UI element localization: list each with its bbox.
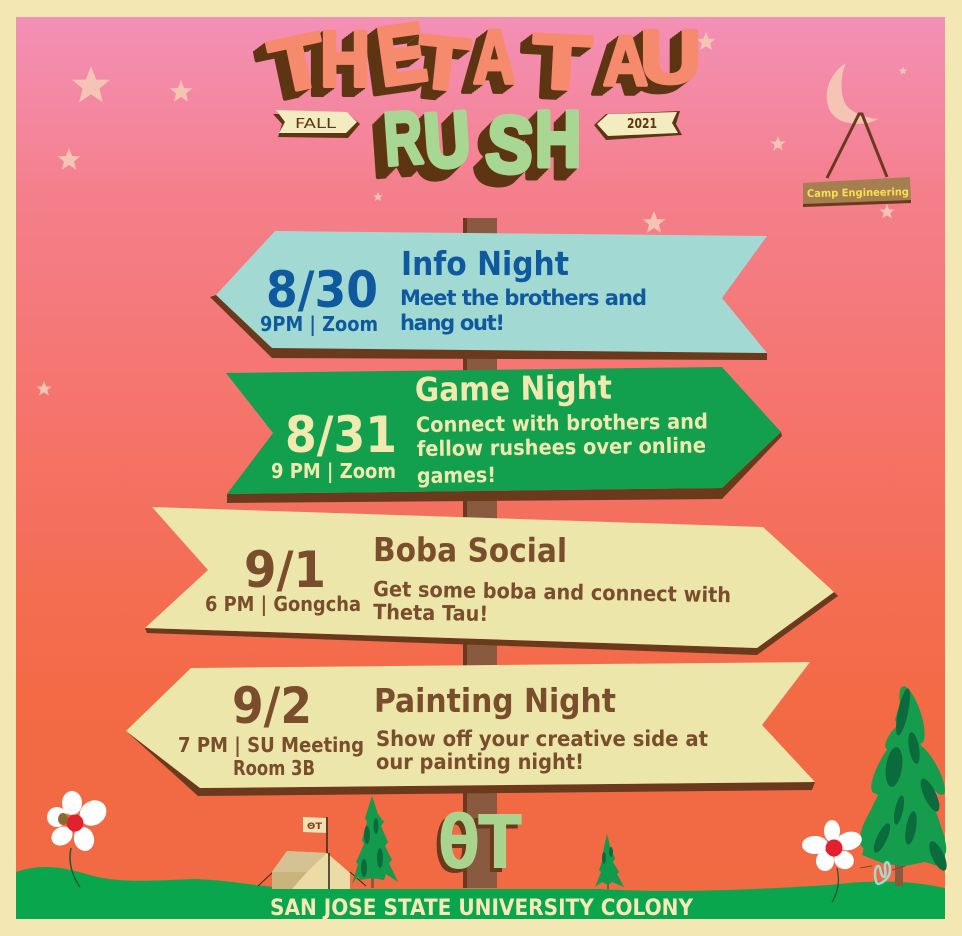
- tent with flag: [258, 817, 366, 889]
- pine tree: by tent: [352, 796, 398, 888]
- title: Rush: U: [421, 96, 473, 185]
- flower: left with bee: [47, 791, 111, 887]
- pine tree: large right: [853, 684, 953, 886]
- sign: Info Night: 8/30: [266, 261, 378, 319]
- pine tree: small: [595, 834, 624, 889]
- sign: Painting Night: Show off your creative side at: [376, 727, 708, 751]
- sign: Game Night: fellow rushees over online: [417, 433, 706, 461]
- sign: Boba Social: Boba Social: [373, 530, 567, 570]
- sign: Game Night: Game Night: [415, 368, 612, 409]
- signpost: [463, 218, 497, 888]
- title: Theta Tau: [263, 6, 701, 110]
- 2021 banner: [594, 111, 682, 140]
- sign: Info Night: hang out!: [400, 311, 505, 335]
- sign: Boba Social: [145, 507, 838, 655]
- Greek letters logo: T: [478, 800, 522, 886]
- title: Theta Tau: T: [413, 19, 473, 107]
- sign: Info Night: 9PM | Zoom: [260, 312, 378, 336]
- sign: Info Night: Meet the brothers and: [400, 286, 647, 310]
- Greek letters logo: θ: [438, 800, 480, 886]
- title: Theta Tau: H: [320, 15, 370, 103]
- sign: Game Night: [226, 367, 782, 503]
- sign: Info Night: [210, 231, 767, 360]
- 2021 banner: 2021: [627, 117, 657, 132]
- sign: Painting Night: 7 PM | SU Meeting: [178, 733, 364, 757]
- title: Theta Tau: E: [372, 6, 432, 104]
- decorative stars: [36, 32, 907, 395]
- title: Rush: H: [535, 96, 581, 184]
- sign: Painting Night: Painting Night: [374, 681, 616, 720]
- title: Theta Tau: A: [473, 15, 516, 100]
- sign: Painting Night: 9/2: [232, 677, 312, 735]
- flower: right: [802, 820, 864, 902]
- sign: Game Night: games!: [417, 463, 496, 488]
- snake mascot: [860, 862, 905, 884]
- FALL banner: [273, 110, 360, 138]
- hanging sign: Camp Engineering: [803, 114, 911, 207]
- sign: Painting Night: [126, 662, 815, 796]
- title: Theta Tau: A: [603, 23, 648, 101]
- tent with flag: ΘΤ: [307, 822, 323, 832]
- sign: Boba Social: Get some boba and connect with: [373, 577, 731, 607]
- title: Rush: S: [483, 98, 537, 191]
- title: Theta Tau: U: [640, 15, 701, 99]
- title: Theta Tau: T: [530, 18, 593, 107]
- Greek letters logo: [434, 800, 522, 890]
- sign: Boba Social: Theta Tau!: [373, 600, 488, 626]
- footer text: SAN JOSE STATE UNIVERSITY COLONY: [270, 896, 694, 921]
- sign: Boba Social: 6 PM | Gongcha: [205, 592, 361, 616]
- hanging sign: Camp Engineering: Camp Engineering: [807, 186, 909, 200]
- sign: Info Night: Info Night: [401, 244, 569, 283]
- title: Rush: [381, 96, 581, 191]
- FALL banner: FALL: [295, 117, 337, 132]
- Greek letters logo: T: [474, 804, 518, 890]
- sign: Boba Social: 9/1: [244, 541, 326, 599]
- icon: crescent moon: [827, 63, 878, 124]
- sign: Painting Night: our painting night!: [376, 750, 584, 774]
- green hill ground: [16, 867, 945, 919]
- sign: Game Night: 9 PM | Zoom: [271, 459, 396, 483]
- sign: Painting Night: Room 3B: [233, 756, 315, 780]
- sign: Game Night: Connect with brothers and: [416, 409, 708, 437]
- Greek letters logo: θ: [434, 804, 476, 890]
- title: Theta Tau: T: [263, 17, 333, 110]
- sign: Game Night: 8/31: [285, 406, 397, 464]
- title: Rush: R: [381, 96, 425, 181]
